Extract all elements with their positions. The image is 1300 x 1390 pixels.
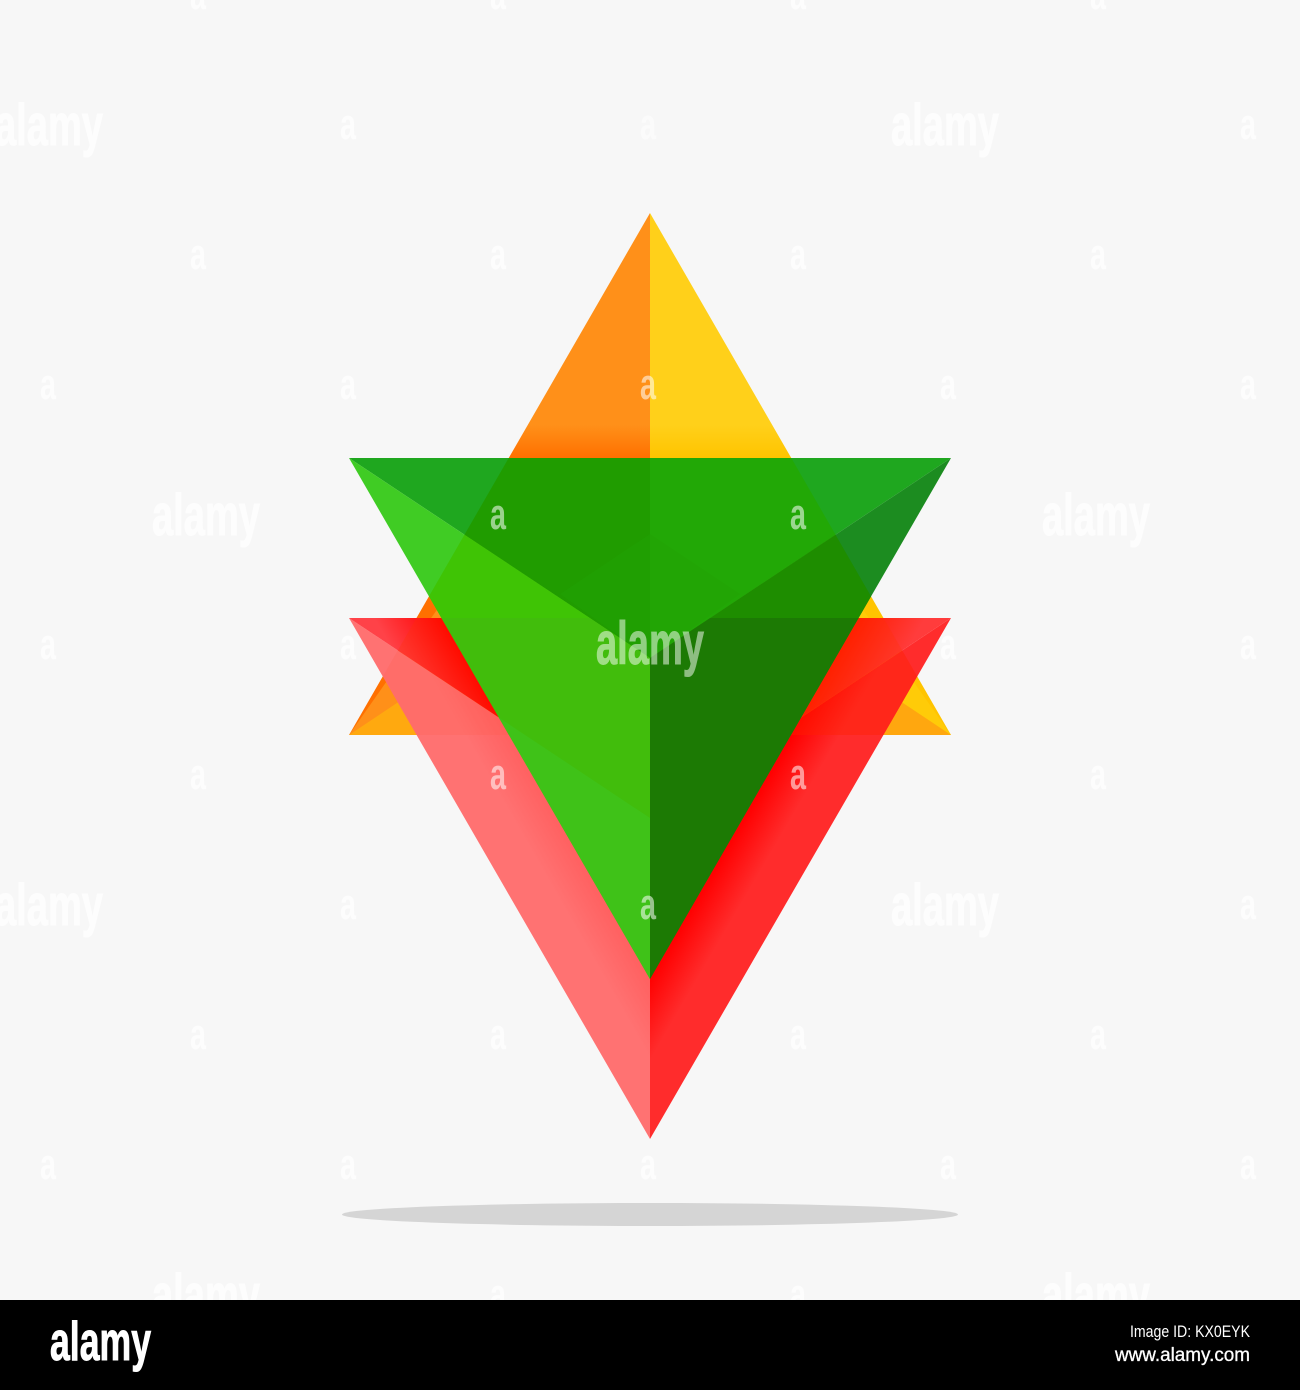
watermark letters on triangles: a — [640, 100, 656, 149]
watermark letters on background: a — [190, 750, 206, 799]
website: www.alamy.com — [1114, 1345, 1250, 1366]
watermark letters on background: a — [1240, 1140, 1256, 1189]
watermark words — [0, 93, 1150, 1328]
watermark words: alamy — [891, 93, 999, 158]
watermark letters on background: a — [40, 1140, 56, 1189]
orange and yellow upward triangle — [349, 213, 951, 735]
watermark letters on triangles: a — [640, 880, 656, 929]
watermark letters on background: a — [490, 1010, 506, 1059]
watermark letters on background: a — [940, 620, 956, 669]
central watermark: alamy — [596, 610, 704, 677]
footer logo: alamy — [50, 1310, 151, 1372]
watermark letters on background: a — [1240, 100, 1256, 149]
watermark letters on background: a — [1240, 880, 1256, 929]
watermark letters on background: a — [340, 100, 356, 149]
watermark letters on triangles — [490, 100, 806, 929]
watermark letters on background: a — [340, 880, 356, 929]
footer bar — [0, 1300, 1300, 1390]
watermark letters on background: a — [40, 620, 56, 669]
watermark letters on background: a — [790, 1270, 806, 1319]
green downward triangle — [349, 458, 951, 979]
watermark words: alamy — [891, 873, 999, 938]
red downward triangle — [349, 618, 951, 1139]
image id: Image ID: KX0EYK — [1130, 1322, 1251, 1341]
watermark letters on triangles: a — [640, 360, 656, 409]
watermark letters on background: a — [790, 1010, 806, 1059]
watermark letters on background: a — [190, 1010, 206, 1059]
watermark letters on triangles: a — [490, 490, 506, 539]
watermark letters on background: a — [340, 620, 356, 669]
watermark letters on background: a — [1240, 620, 1256, 669]
watermark words: alamy — [152, 1263, 260, 1328]
watermark letters on background: a — [640, 1140, 656, 1189]
watermark letters on background: a — [340, 1140, 356, 1189]
watermark words: alamy — [1042, 1263, 1150, 1328]
ground shadow — [342, 1203, 958, 1226]
watermark letters on background: a — [40, 360, 56, 409]
watermark letters on triangles: a — [790, 490, 806, 539]
watermark letters on background: a — [790, 230, 806, 279]
watermark letters on background: a — [1090, 230, 1106, 279]
watermark letters on background: a — [1090, 750, 1106, 799]
watermark letters on triangles: a — [490, 750, 506, 799]
watermark letters on background: a — [490, 1270, 506, 1319]
watermark letters on triangles: a — [790, 750, 806, 799]
watermark words: alamy — [152, 483, 260, 548]
watermark letters on background: a — [490, 230, 506, 279]
watermark letters on background: a — [1240, 360, 1256, 409]
watermark letters on background: a — [1090, 1010, 1106, 1059]
watermark letters on background: a — [340, 360, 356, 409]
watermark letters on background: a — [190, 230, 206, 279]
watermark words: alamy — [1042, 483, 1150, 548]
watermark letters on background: a — [940, 1140, 956, 1189]
watermark letters on background: a — [940, 360, 956, 409]
